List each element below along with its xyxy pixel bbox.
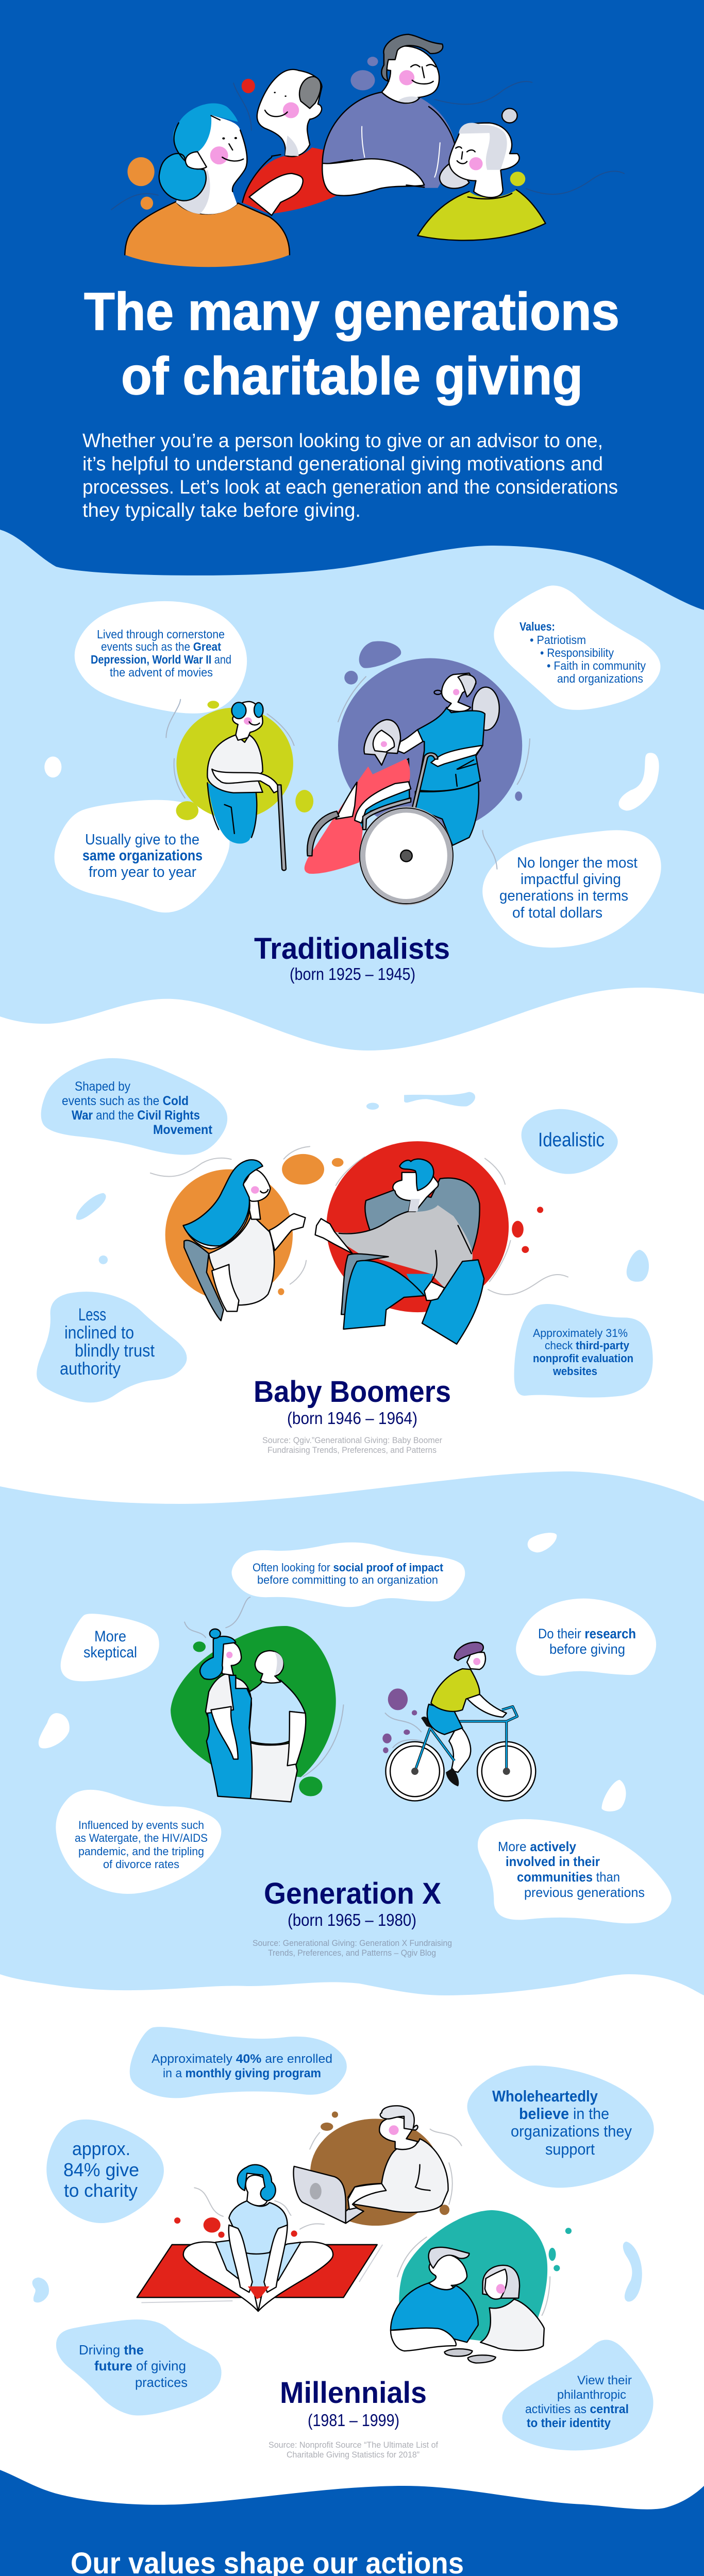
- callout: driving the future: future of giving: [94, 2358, 186, 2374]
- panel: traditionalists: [44, 586, 661, 984]
- callout: 40% monthly giving: [130, 2027, 347, 2098]
- callout: shaped by events: Shaped by: [75, 1079, 130, 1094]
- callout: wholeheartedly believe: Wholeheartedly: [492, 2087, 598, 2105]
- callout: social proof: Often looking for social proof of impact: [253, 1561, 444, 1574]
- callout: more actively involved: involved in their: [506, 1854, 600, 1869]
- subheading: 1981-1999: (1981 – 1999): [308, 2411, 399, 2430]
- title: [84, 282, 619, 405]
- callout: idealistic: [522, 1109, 618, 1174]
- callout: 84% give to charity: to charity: [64, 2180, 138, 2201]
- callout: more skeptical: skeptical: [83, 1644, 137, 1661]
- callout: cornerstone events: Lived through cornerstone: [97, 628, 225, 641]
- hero illustration: four generations: [111, 35, 624, 267]
- intro text: Whether you’re a person looking to give or an advisor to one,: [82, 430, 603, 452]
- person: red shirt: [242, 70, 338, 214]
- callout: same organizations: [55, 800, 229, 912]
- decorative blobs: [44, 753, 659, 810]
- person: blue-haired woman orange shirt: [125, 104, 303, 267]
- callout: 31% check evaluation websites: nonprofit evaluation: [533, 1352, 633, 1365]
- title: of charitable giving: [121, 346, 583, 405]
- callout: 40% monthly giving: Approximately 40% are enrolled: [152, 2052, 332, 2066]
- band: white baby boomers background: [0, 988, 704, 2576]
- callout: central to identity: philanthropic: [557, 2388, 626, 2402]
- callout: more skeptical: More: [94, 1628, 126, 1645]
- callout: cornerstone events: [75, 601, 247, 714]
- callout: more actively involved: More actively: [498, 1839, 577, 1854]
- callout: less inclined to trust: inclined to: [64, 1323, 134, 1343]
- illustration: woman with long blue hair: [150, 1154, 343, 1320]
- source note: [269, 2440, 438, 2460]
- source note: Source: Nonprofit Source “The Ultimate List of: [269, 2440, 438, 2450]
- callout: same organizations: Usually give to the: [85, 832, 199, 848]
- callout: do their research: [516, 1599, 656, 1676]
- illustration: laptop worker: [294, 2106, 462, 2226]
- callout: social proof: [232, 1543, 465, 1607]
- band: blue footer background: [0, 2470, 704, 2576]
- decorative blobs: [76, 1092, 649, 1282]
- callout: more skeptical: [61, 1614, 159, 1681]
- callout: shaped by events: War and the Civil Rights: [72, 1108, 200, 1123]
- callout: less inclined to trust: blindly trust: [75, 1341, 155, 1361]
- person: purple shirt man: [322, 35, 457, 196]
- callout: values: Values:: [519, 620, 555, 633]
- callout: influenced by events: pandemic, and the tripling: [78, 1845, 204, 1858]
- subheading: born 1946-1964: (born 1946 – 1964): [287, 1409, 417, 1428]
- callout: influenced by events: of divorce rates: [103, 1858, 179, 1871]
- callout: 84% give to charity: [46, 2120, 164, 2223]
- callout: do their research: Do their research: [538, 1626, 636, 1641]
- intro text: processes. Let’s look at each generation and the considerations: [82, 477, 618, 498]
- callout: 31% check evaluation websites: check third-party: [545, 1339, 630, 1352]
- callout: 84% give to charity: 84% give: [63, 2159, 139, 2180]
- callout: no longer most impactful: impactful giving: [521, 871, 621, 888]
- callout: cornerstone events: Depression, World War II and: [91, 653, 231, 666]
- decorative blobs: [32, 2242, 642, 2302]
- panel: millennials: [32, 2027, 654, 2460]
- callout: 84% give to charity: approx.: [72, 2138, 130, 2159]
- callout: no longer most impactful: of total dollars: [512, 905, 602, 921]
- callout: wholeheartedly believe: support: [545, 2140, 595, 2158]
- callout: influenced by events: Influenced by events such: [78, 1819, 204, 1832]
- callout: less inclined to trust: [37, 1292, 187, 1402]
- heading: traditionalists: Traditionalists: [254, 932, 450, 965]
- heading: baby boomers: Baby Boomers: [254, 1375, 451, 1409]
- callout: wholeheartedly believe: [467, 2065, 654, 2188]
- subheading: born 1965-1980: (born 1965 – 1980): [288, 1910, 416, 1929]
- callout: no longer most impactful: No longer the most: [517, 855, 638, 871]
- callout: influenced by events: as Watergate, the HIV/AIDS: [75, 1832, 208, 1844]
- callout: wholeheartedly believe: organizations they: [511, 2122, 632, 2140]
- callout: more actively involved: previous generations: [524, 1885, 645, 1900]
- callout: cornerstone events: the advent of movies: [110, 666, 213, 679]
- panel: generation x: [39, 1533, 672, 1958]
- illustration: man with cane: [166, 700, 313, 870]
- callout: 31% check evaluation websites: Approximately 31%: [533, 1327, 628, 1340]
- callout: central to identity: View their: [577, 2374, 632, 2387]
- title: The many generations: [84, 282, 619, 341]
- heading: millennials: Millennials: [280, 2376, 427, 2410]
- illustration: nurse pushing wheelchair: [305, 641, 530, 904]
- callout: 31% check evaluation websites: websites: [552, 1365, 597, 1378]
- callout: shaped by events: events such as the Cold: [62, 1094, 189, 1108]
- callout: shaped by events: Movement: [153, 1123, 213, 1137]
- callout: less inclined to trust: Less: [78, 1305, 106, 1325]
- intro text: they typically take before giving.: [82, 500, 361, 521]
- illustration: couple on green blob: [171, 1597, 343, 1802]
- intro text: it’s helpful to understand generational giving motivations and: [82, 453, 603, 475]
- band: light blue generation x background: [0, 1471, 704, 2576]
- source note: Trends, Preferences, and Patterns – Qgiv Blog: [268, 1948, 436, 1958]
- callout: shaped by events: [41, 1058, 227, 1155]
- source note: Source: Qgiv.”Generational Giving: Baby Boomer: [262, 1435, 442, 1445]
- subheading: born 1925-1945: (born 1925 – 1945): [290, 964, 415, 984]
- source note: [262, 1435, 442, 1455]
- callout: central to identity: [502, 2340, 653, 2450]
- callout: more actively involved: communities than: [517, 1869, 620, 1885]
- callout: values: and organizations: [557, 672, 643, 685]
- source note: Source: Generational Giving: Generation X Fundraising: [253, 1938, 452, 1948]
- callout: 40% monthly giving: in a monthly giving program: [163, 2066, 321, 2080]
- callout: same organizations: same organizations: [82, 848, 203, 864]
- callout: more actively involved: [478, 1819, 672, 1923]
- callout: cornerstone events: events such as the Great: [101, 640, 221, 653]
- band: light blue traditionalists background: [0, 530, 704, 2576]
- decorative blobs: [39, 1533, 626, 1811]
- illustration: cyclist: [382, 1642, 535, 1801]
- callout: less inclined to trust: authority: [60, 1359, 121, 1379]
- callout: values: • Patriotism: [530, 633, 586, 647]
- callout: influenced by events: [56, 1790, 221, 1894]
- person: old woman yellow shirt: [417, 123, 546, 241]
- callout: driving the future: practices: [135, 2375, 188, 2390]
- band: white millennials background: [0, 1974, 704, 2576]
- illustration: man in armchair: [284, 1141, 568, 1344]
- illustration: couple on teal blob: [391, 2210, 572, 2363]
- intro text: [82, 430, 618, 521]
- callout: no longer most impactful: generations in terms: [499, 888, 628, 904]
- callout: same organizations: from year to year: [89, 864, 196, 880]
- callout: central to identity: to their identity: [527, 2416, 611, 2430]
- callout: wholeheartedly believe: believe in the: [519, 2105, 609, 2123]
- panel: baby boomers: [37, 1058, 653, 1455]
- callout: no longer most impactful: [482, 830, 661, 947]
- callout: idealistic: Idealistic: [538, 1129, 605, 1151]
- callout: values: • Faith in community: [547, 659, 646, 672]
- heading: generation x: Generation X: [264, 1877, 441, 1910]
- callout: do their research: before giving: [549, 1641, 625, 1657]
- source note: [253, 1938, 452, 1958]
- callout: values: • Responsibility: [540, 646, 614, 659]
- source note: Charitable Giving Statistics for 2018”: [287, 2450, 420, 2460]
- callout: 31% check evaluation websites: [514, 1304, 653, 1398]
- callout: values: [494, 586, 660, 710]
- callout: driving the future: [56, 2319, 222, 2415]
- source note: Fundraising Trends, Preferences, and Patterns: [267, 1445, 437, 1455]
- callout: social proof: before committing to an organization: [257, 1573, 438, 1586]
- callout: central to identity: activities as central: [525, 2402, 629, 2416]
- callout: driving the future: Driving the: [79, 2342, 144, 2358]
- illustration: yoga woman on red mat: [137, 2165, 382, 2311]
